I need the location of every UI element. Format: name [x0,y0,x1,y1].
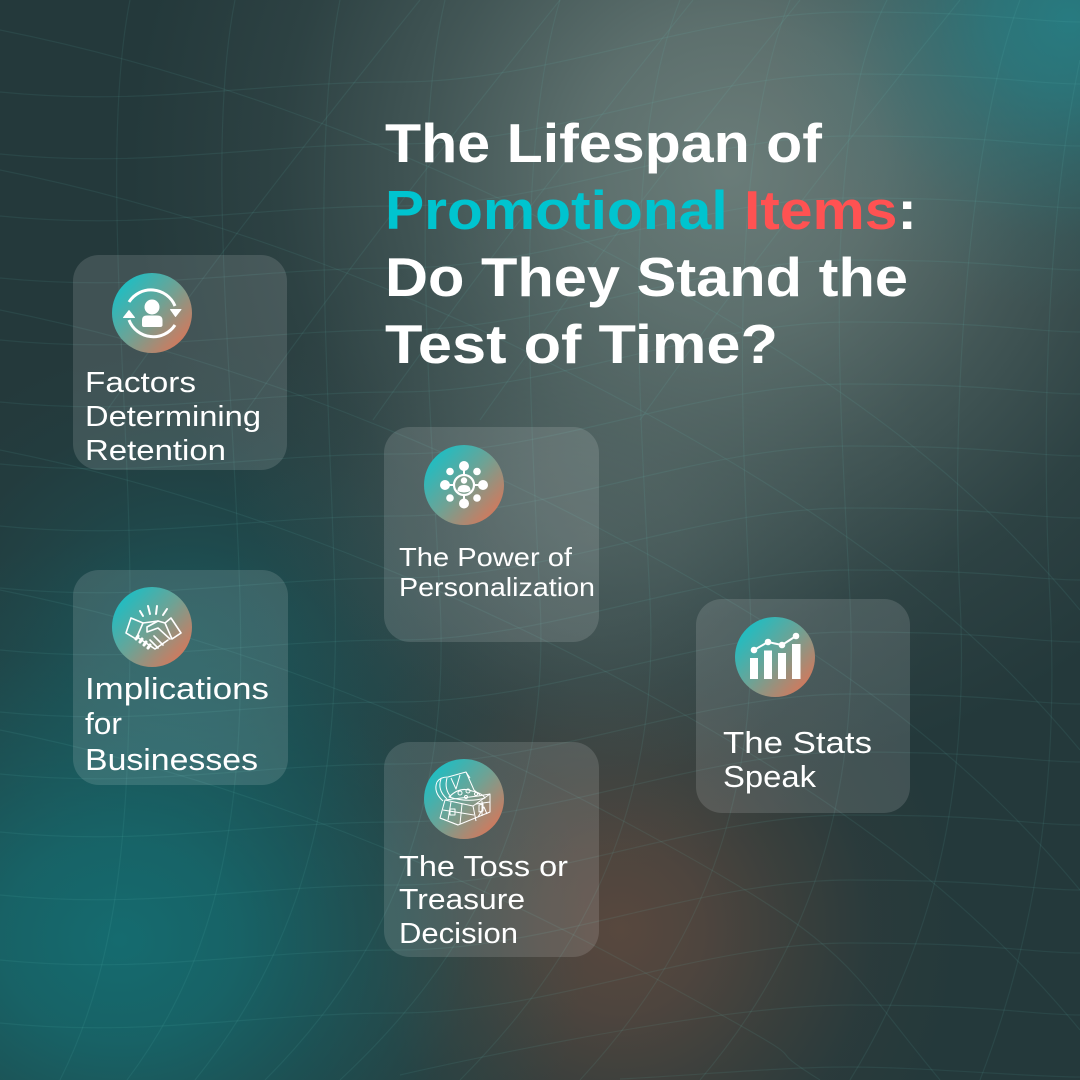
label: the stats speak [723,725,872,794]
panel: the power of personalization [384,427,599,642]
label: implications for businesses [85,671,269,777]
label: implications for businesses: Implications [85,671,269,706]
label: factors determining retention: Factors [85,367,196,399]
label: the power of personalization [399,542,595,602]
label: the toss or treasure decision [399,851,568,950]
icon: bar and line chart [735,617,815,697]
icon: person with rotating arrows [112,273,192,353]
icon: handshake [112,587,192,667]
label: the toss or treasure decision: Treasure [399,884,525,916]
label: factors determining retention: Retention [85,435,226,467]
panel: factors determining retention [73,255,287,470]
label: the power of personalization: Personalization [399,572,595,602]
label: implications for businesses: for [85,706,122,741]
icon: personalization network [424,445,504,525]
panel: implications for businesses [73,570,288,785]
title: The Lifespan of [385,112,823,174]
label: factors determining retention [85,367,261,467]
label: implications for businesses: Businesses [85,742,258,777]
label: the stats speak: The Stats [723,725,872,760]
label: the toss or treasure decision: Decision [399,918,518,950]
panel: the toss or treasure decision [384,742,599,957]
title [385,112,917,375]
panel: the stats speak [696,599,910,813]
label: factors determining retention: Determining [85,401,261,433]
label: the toss or treasure decision: The Toss or [399,851,568,883]
title: Test of Time? [385,313,778,375]
label: the stats speak: Speak [723,759,817,794]
icon: treasure chest [424,759,504,839]
title: Do They Stand the [385,246,908,308]
label: the power of personalization: The Power of [399,542,573,572]
title: Promotional Items: [385,179,917,241]
